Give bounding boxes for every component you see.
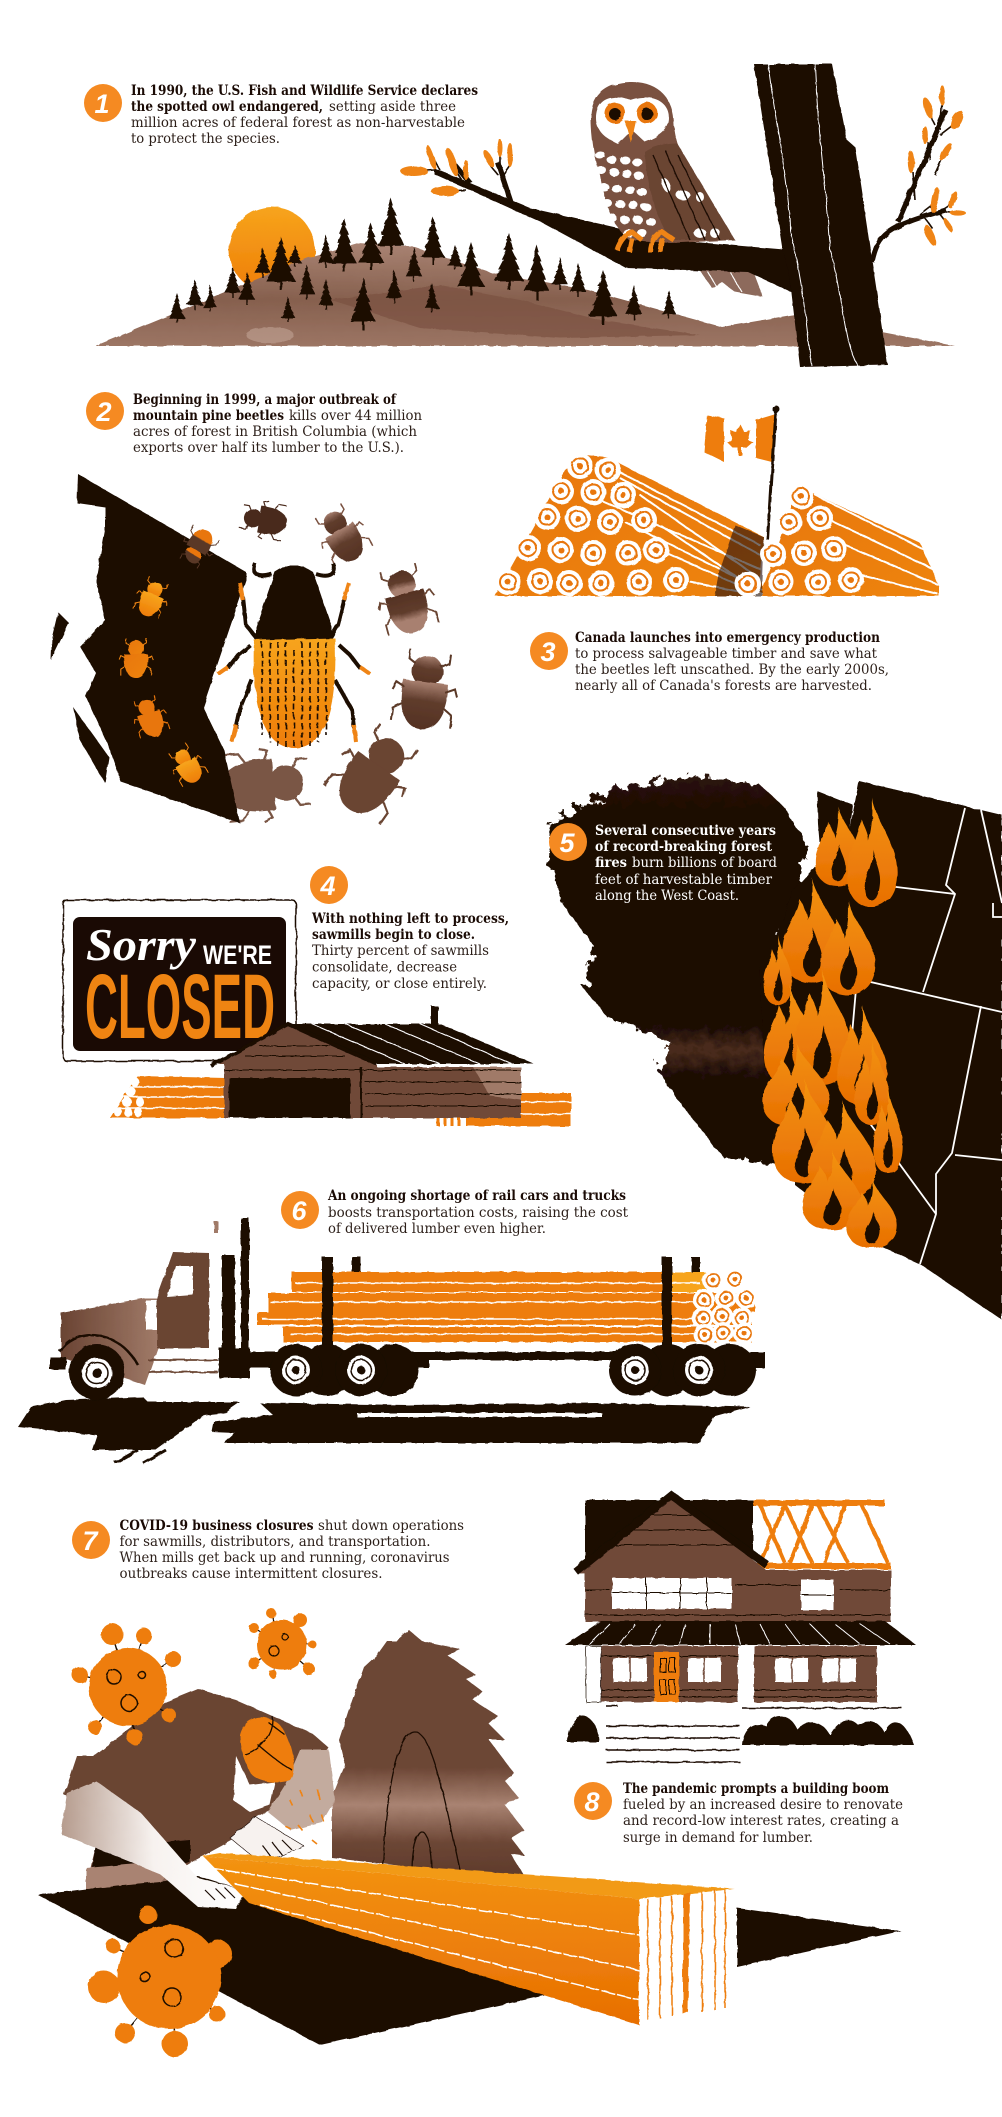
panel: step 6 logging truck xyxy=(18,1218,765,1463)
badge 4: 4 xyxy=(319,871,336,901)
text: step 4 xyxy=(311,911,509,992)
text: step 4: sawmills begin to close. xyxy=(312,927,475,943)
logs on the trailer xyxy=(257,1257,757,1349)
lower windows xyxy=(613,1658,856,1682)
porch columns xyxy=(586,1646,893,1702)
badge 5 xyxy=(549,823,587,861)
text: step 1: In 1990, the U.S. Fish and Wildlife Service declares xyxy=(131,83,478,99)
icon: Canadian flag on pole xyxy=(704,406,780,540)
text: step 7 xyxy=(120,1518,464,1582)
text: step 6: of delivered lumber even higher. xyxy=(328,1221,546,1237)
door xyxy=(654,1652,679,1702)
lower wall xyxy=(601,1646,877,1702)
badge 3 xyxy=(530,632,568,670)
text: step 7: COVID-19 business closures xyxy=(120,1518,314,1534)
text: step 3: the beetles left unscathed. By the early 2000s, xyxy=(575,662,889,678)
text: step 1: setting aside three xyxy=(329,99,456,115)
steps and ground lines xyxy=(606,1706,902,1762)
illustration: lumber boards xyxy=(203,1853,735,2025)
text: step 1: to protect the species. xyxy=(131,131,280,147)
illustration: closed sign: Sorry xyxy=(86,919,197,970)
illustration: smoke cloud xyxy=(550,776,808,1167)
badge 5: 5 xyxy=(559,828,575,858)
text: step 6 xyxy=(327,1188,628,1237)
orange roof truss xyxy=(753,1503,891,1566)
illustration: dark work table xyxy=(38,1876,901,2045)
text: step 5: fires xyxy=(595,855,627,871)
text: step 7: outbreaks cause intermittent closures. xyxy=(120,1566,382,1582)
text: step 1: million acres of federal forest as non-harvestable xyxy=(131,115,465,131)
text: step 7: When mills get back up and running, coronavirus xyxy=(120,1550,450,1566)
icon: virus bottom xyxy=(88,1906,232,2057)
icon: virus top left xyxy=(72,1623,181,1745)
state borders xyxy=(783,808,1002,1264)
text: step 3: nearly all of Canada's forests are harvested. xyxy=(575,678,872,694)
panel: step 8 house under construction xyxy=(565,1495,916,1762)
badge 7: 7 xyxy=(82,1526,99,1556)
upper wall xyxy=(585,1570,891,1622)
badge 7 xyxy=(72,1521,110,1559)
text: step 5: feet of harvestable timber xyxy=(595,872,772,888)
text: step 5: of record-breaking forest xyxy=(595,839,772,855)
panel: step 3 log pile and flag xyxy=(495,406,939,597)
panel: step 2 beetles xyxy=(51,474,463,830)
illustration: ring of brown beetles xyxy=(218,497,463,830)
badge 2 xyxy=(86,392,124,430)
text: step 2: exports over half its lumber to the U.S.). xyxy=(133,440,404,456)
text: step 7: for sawmills, distributors, and transportation. xyxy=(120,1534,430,1550)
illustration: tree trunk xyxy=(754,64,888,367)
panel: step 4 closed sawmill xyxy=(63,900,571,1126)
map: British Columbia xyxy=(51,474,246,823)
text: step 2: mountain pine beetles xyxy=(133,408,284,424)
illustration: closed sign: WE'RE xyxy=(203,940,272,970)
text: step 7: shut down operations xyxy=(318,1518,464,1534)
truck cab and chassis xyxy=(50,1218,765,1385)
panel: step 1 spotted owl xyxy=(95,64,966,367)
text: step 8: fueled by an increased desire to renovate xyxy=(623,1797,903,1813)
illustration: hills with forest and sun xyxy=(95,198,955,346)
text: step 2: acres of forest in British Columbia (which xyxy=(133,424,417,440)
text: step 5: along the West Coast. xyxy=(595,888,739,904)
text: step 5 xyxy=(595,823,777,904)
text: step 5: Several consecutive years xyxy=(595,823,776,839)
illustration: closed sign xyxy=(63,900,296,1061)
illustration: worker xyxy=(61,1689,335,1909)
illustration: branch with leaves xyxy=(400,85,966,296)
illustration: closed sign: CLOSED xyxy=(85,956,275,1058)
text: step 1: the spotted owl endangered, xyxy=(131,99,323,115)
badge 3: 3 xyxy=(540,637,556,667)
text: step 2: Beginning in 1999, a major outbreak of xyxy=(133,392,397,408)
badge 8 xyxy=(574,1782,612,1820)
panel: step 5 wildfires xyxy=(550,776,1002,1320)
text: step 8: surge in demand for lumber. xyxy=(623,1830,813,1846)
badge 2: 2 xyxy=(95,397,112,427)
icon: virus top middle xyxy=(248,1608,316,1678)
illustration: big pine beetle xyxy=(218,563,370,748)
illustration: saw blade xyxy=(332,1630,527,1880)
illustration: log pile xyxy=(495,453,939,597)
illustration: owl tail feathers xyxy=(698,268,763,297)
map: western United States xyxy=(760,781,1002,1320)
illustration: spotted owl xyxy=(591,82,735,252)
text: step 8: and record-low interest rates, creating a xyxy=(623,1813,899,1829)
text: step 3: Canada launches into emergency production xyxy=(575,630,880,646)
road shadow xyxy=(18,1397,750,1463)
badge 4 xyxy=(310,866,348,904)
panel: step 7 sawmill worker xyxy=(38,1608,901,2057)
porch roof xyxy=(565,1621,916,1645)
illustration: sawmill building xyxy=(211,1006,534,1118)
gable xyxy=(579,1496,766,1574)
upper windows xyxy=(612,1578,834,1610)
small beetles on the map xyxy=(119,523,221,789)
text: step 4: Thirty percent of sawmills xyxy=(312,943,489,959)
bushes xyxy=(567,1716,914,1745)
badge 8: 8 xyxy=(584,1787,600,1817)
text: step 4: consolidate, decrease xyxy=(312,960,457,976)
text: step 1 xyxy=(131,83,478,147)
text: step 3: to process salvageable timber and save what xyxy=(575,646,877,662)
text: step 6: An ongoing shortage of rail cars and trucks xyxy=(327,1188,626,1204)
truck wheels xyxy=(69,1344,756,1400)
text: step 2 xyxy=(133,392,422,456)
badge 6 xyxy=(281,1191,319,1229)
text: step 8 xyxy=(623,1781,903,1846)
badge 1: 1 xyxy=(94,89,110,119)
text: step 4: With nothing left to process, xyxy=(311,911,509,927)
text: step 6: boosts transportation costs, raising the cost xyxy=(328,1205,628,1221)
text: step 3 xyxy=(575,630,889,694)
illustration: lumber piles xyxy=(110,1076,571,1126)
badge 6: 6 xyxy=(291,1196,307,1226)
text: step 8: The pandemic prompts a building boom xyxy=(623,1781,889,1797)
illustration: flames xyxy=(762,797,903,1248)
text: step 5: burn billions of board xyxy=(632,855,777,871)
text: step 4: capacity, or close entirely. xyxy=(312,976,487,992)
upper roof xyxy=(585,1500,753,1570)
text: step 2: kills over 44 million xyxy=(289,408,422,424)
badge 1 xyxy=(84,84,122,122)
